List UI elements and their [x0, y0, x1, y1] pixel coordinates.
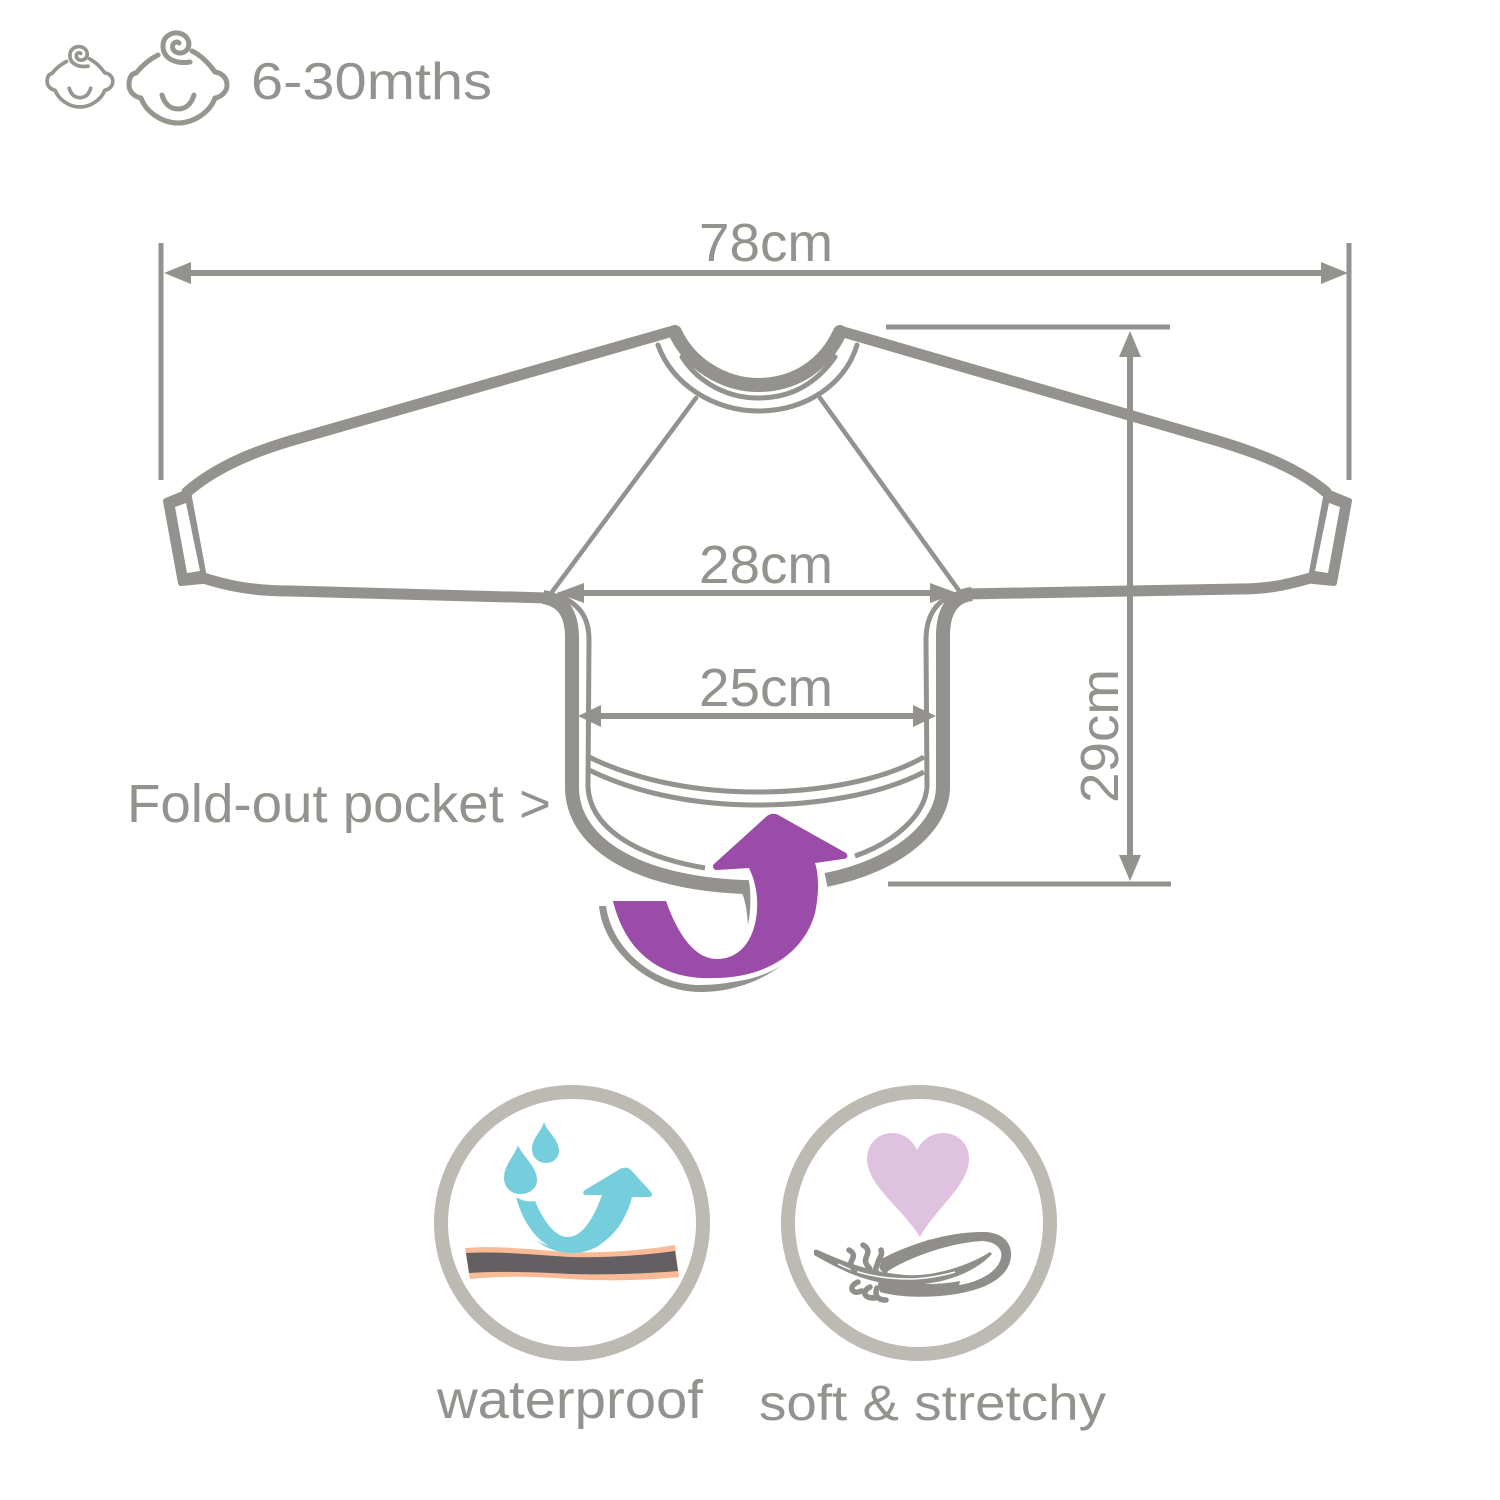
- badge ring: [441, 1092, 703, 1354]
- bib outline diagram: [166, 331, 1349, 887]
- right sleeve: [840, 331, 1349, 594]
- left sleeve: [166, 331, 673, 598]
- arrow: [613, 814, 847, 978]
- dimension: height 29cm: [886, 327, 1171, 884]
- arrow shadow crescent: [599, 906, 795, 992]
- purple fold-out arrow: [599, 814, 847, 992]
- dimension: width 78cm: 78cm: [699, 213, 833, 273]
- soft and stretchy label: soft & stretchy: [759, 1375, 1106, 1431]
- age range text: 6-30mths: [251, 53, 492, 111]
- dimension: height 29cm: 29cm: [1070, 669, 1130, 803]
- icon: large baby face: [129, 33, 227, 123]
- neckline: [658, 332, 857, 411]
- arrow bottom overlapping fabric: [536, 1240, 608, 1253]
- icon: heart: [867, 1133, 969, 1237]
- arrow shadow sliver: [742, 880, 750, 925]
- bib body outer edge: [543, 594, 972, 887]
- bib inner seam: [557, 594, 950, 868]
- waterproof label: waterproof: [436, 1370, 704, 1430]
- icon: water drops: [504, 1122, 559, 1194]
- dimension: bib 25cm: [578, 658, 936, 727]
- fold-out pocket label: Fold-out pocket >: [127, 774, 551, 834]
- raglan seams: [552, 398, 960, 592]
- dimension: chest 28cm: [557, 535, 957, 603]
- badge: waterproof: [441, 1092, 703, 1354]
- pocket fold lines: [589, 757, 924, 805]
- dimension: width 78cm: [161, 213, 1349, 480]
- badge: soft and stretchy: [788, 1092, 1050, 1354]
- icon: feather: [814, 1232, 1011, 1300]
- age range header: [47, 33, 492, 123]
- icon: small baby face: [47, 47, 113, 107]
- icon: fabric layers: [465, 1245, 679, 1280]
- badge ring: [788, 1092, 1050, 1354]
- dimension: bib 25cm: 25cm: [699, 658, 833, 718]
- icon: bounce arrow: [516, 1168, 652, 1252]
- dimension: chest 28cm: 28cm: [699, 535, 833, 595]
